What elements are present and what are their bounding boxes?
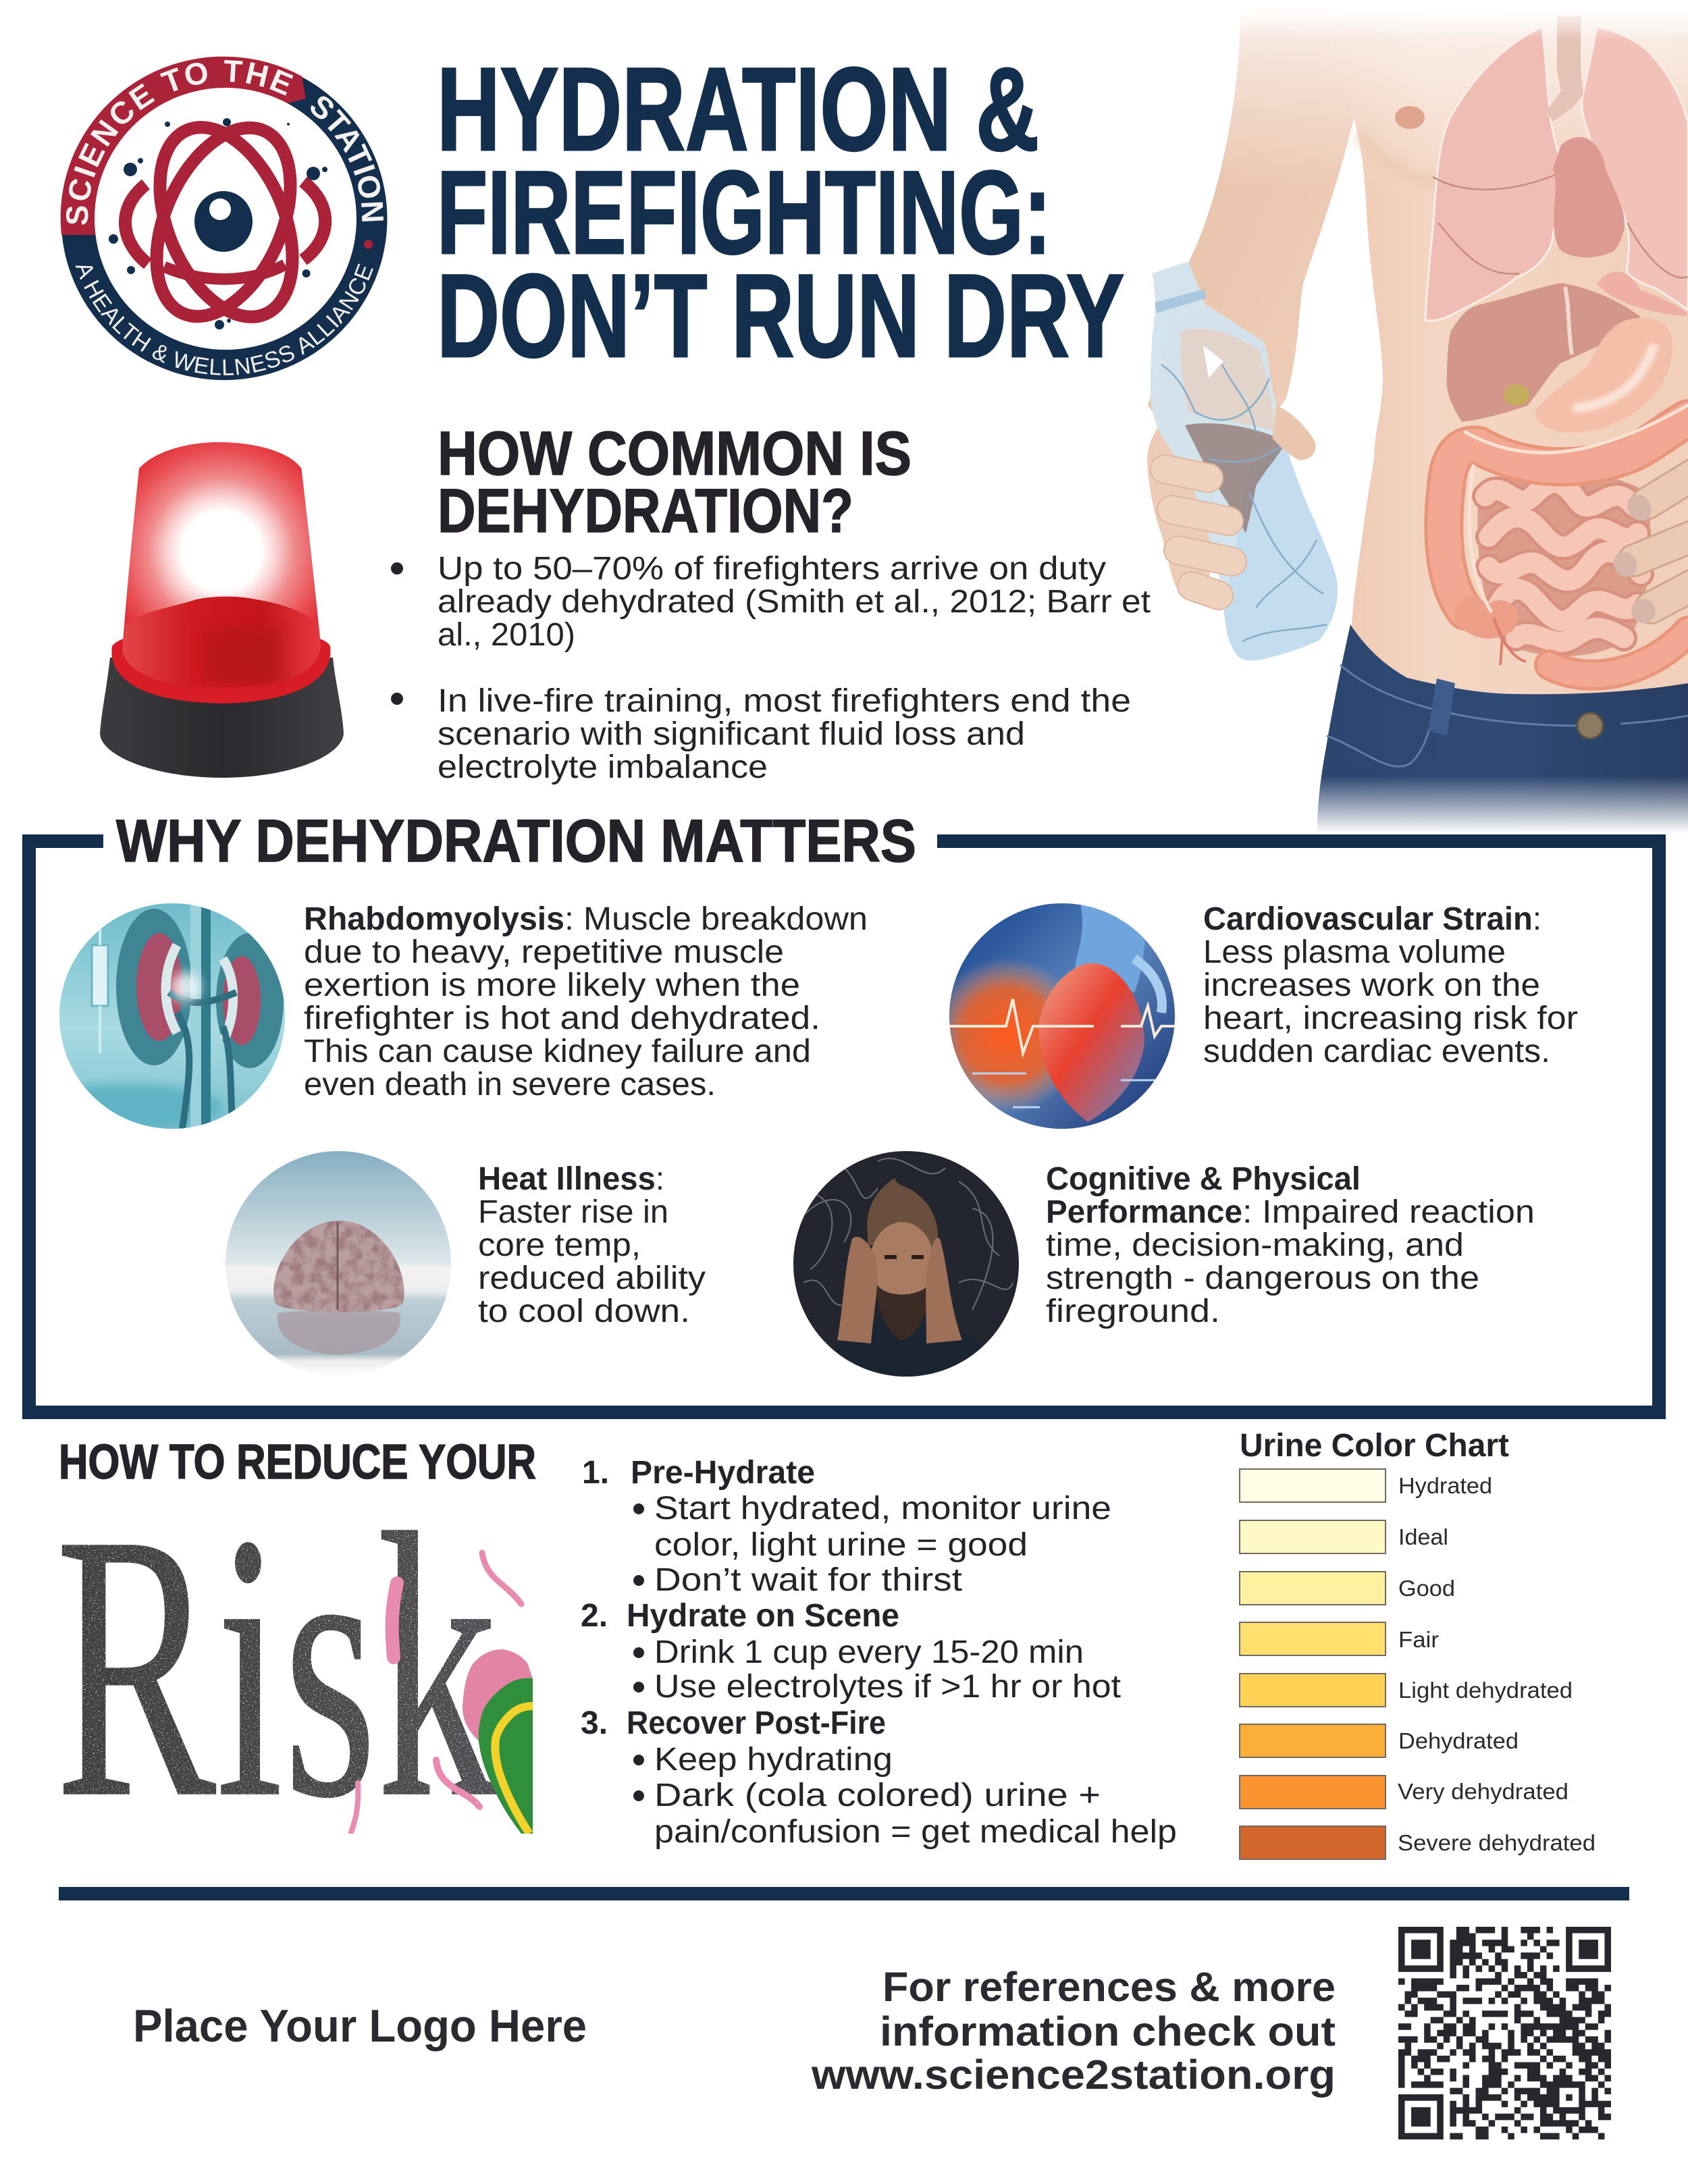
logo dots bbox=[109, 118, 327, 329]
step 1 bbox=[582, 1455, 1111, 1598]
hand fingers bbox=[1165, 469, 1232, 595]
swatch labels: Severe dehydrated bbox=[1398, 1830, 1595, 1855]
appendix vessel bbox=[1494, 618, 1526, 665]
title: FIREFIGHTING: bbox=[437, 147, 1051, 279]
image: risk being erased bbox=[55, 1456, 533, 1876]
text: rhabdomyolysis: firefighter is hot and dehydrated. bbox=[304, 1001, 820, 1036]
step 1: Start hydrated, monitor urine bbox=[654, 1491, 1111, 1526]
pale top wash bbox=[1222, 11, 1688, 163]
left forearm bbox=[837, 1237, 878, 1343]
text: cardiovascular strain: sudden cardiac events. bbox=[1203, 1034, 1550, 1069]
text: cognitive and physical performance: time, decision-making, and bbox=[1046, 1227, 1464, 1263]
eyes bbox=[885, 1255, 924, 1259]
swatch labels: Dehydrated bbox=[1398, 1728, 1519, 1753]
footer references text: For references & more bbox=[882, 1964, 1336, 2010]
brain body bbox=[273, 1221, 404, 1312]
text: heat illness: core temp, bbox=[478, 1227, 641, 1263]
title bbox=[437, 44, 1124, 382]
bullet one bbox=[391, 551, 1151, 653]
arm bbox=[1148, 7, 1354, 446]
text: heat illness: reduced ability bbox=[478, 1260, 706, 1296]
eraser crumbs bbox=[351, 1553, 521, 1832]
logo top text: SCIENCE TO THE bbox=[66, 59, 293, 225]
logo nucleus highlight bbox=[209, 198, 231, 220]
diaphragm tip bbox=[1597, 271, 1688, 316]
panel: why dehydration matters bbox=[22, 807, 1666, 1419]
step 3: Recover Post-Fire bbox=[627, 1705, 886, 1741]
heart bbox=[1553, 137, 1625, 257]
jeans bbox=[1317, 624, 1688, 837]
text: rhabdomyolysis bbox=[304, 901, 868, 1102]
bullet one: Up to 50–70% of firefighters arrive on duty bbox=[438, 551, 1106, 587]
step 2: Use electrolytes if >1 hr or hot bbox=[654, 1669, 1121, 1705]
eraser pink tip bbox=[463, 1649, 533, 1755]
belt loop bbox=[1428, 678, 1455, 736]
stomach bbox=[1535, 318, 1672, 433]
footer references text: information check out bbox=[880, 2008, 1336, 2054]
step 2: 2. bbox=[581, 1598, 608, 1634]
trachea bbox=[1546, 16, 1583, 122]
bottle lower water tint bbox=[1224, 446, 1338, 660]
lung fissures bbox=[1433, 174, 1688, 277]
step 3: pain/confusion = get medical help bbox=[654, 1814, 1177, 1850]
hand palm bbox=[1147, 422, 1215, 594]
chart title: Urine Color Chart bbox=[1240, 1428, 1509, 1464]
hand thumb bbox=[1273, 405, 1315, 460]
siren dome lower bbox=[122, 597, 321, 687]
liver ligament bbox=[1565, 287, 1572, 354]
text: heat illness: to cool down. bbox=[478, 1294, 690, 1329]
footer rule bbox=[59, 1887, 1629, 1900]
heading: how to reduce your: HOW TO REDUCE YOUR bbox=[59, 1435, 536, 1489]
large intestine bbox=[1444, 405, 1688, 675]
text: rhabdomyolysis: This can cause kidney failure and bbox=[304, 1034, 811, 1069]
heading bbox=[438, 419, 912, 545]
dark band through bottle bbox=[1185, 423, 1286, 533]
text: cognitive and physical performance: Performance bbox=[1046, 1194, 1242, 1230]
hair bbox=[867, 1178, 938, 1246]
nipple bbox=[1395, 106, 1425, 129]
image: kidneys bbox=[34, 903, 285, 1130]
text: heat illness bbox=[478, 1161, 706, 1329]
shirt bbox=[810, 1316, 1006, 1377]
title: DON’T RUN DRY bbox=[437, 250, 1124, 382]
footer references text bbox=[811, 1964, 1336, 2098]
left lung bbox=[1582, 27, 1688, 310]
image: brain bbox=[226, 1151, 451, 1377]
illustration: torso with organs and crushed bottle bbox=[1114, 0, 1688, 837]
stomach highlight bbox=[1573, 344, 1654, 408]
logo: Science to the Station badge bbox=[61, 57, 388, 380]
fingers on abdomen bbox=[1634, 466, 1688, 608]
bullet two: scenario with significant fluid loss and bbox=[438, 716, 1025, 752]
siren dark core bbox=[203, 628, 284, 682]
beard bbox=[875, 1279, 932, 1340]
panel heading: WHY DEHYDRATION MATTERS bbox=[116, 807, 916, 874]
title: HYDRATION & bbox=[437, 44, 1039, 176]
text: rhabdomyolysis: exertion is more likely when the bbox=[304, 967, 800, 1003]
bottle bbox=[1151, 261, 1338, 661]
text: cardiovascular strain: Cardiovascular Strain: bbox=[1203, 901, 1541, 937]
logo red arc band bbox=[61, 57, 306, 235]
bottle cracks bbox=[1161, 365, 1327, 641]
text: cognitive and physical performance bbox=[1046, 1161, 1535, 1329]
text: cardiovascular strain: heart, increasing risk for bbox=[1203, 1001, 1578, 1036]
swatch labels: Light dehydrated bbox=[1398, 1678, 1573, 1703]
text: rhabdomyolysis: Rhabdomyolysis bbox=[304, 901, 564, 937]
logo nucleus bbox=[194, 191, 253, 252]
step 1: color, light urine = good bbox=[654, 1527, 1028, 1563]
footer references text: www.science2station.org bbox=[811, 2052, 1336, 2098]
eraser yellow stripe bbox=[495, 1706, 533, 1834]
siren glow bbox=[184, 513, 259, 589]
bottle collar bbox=[1155, 289, 1206, 313]
heading: DEHYDRATION? bbox=[438, 477, 853, 545]
siren base bbox=[100, 658, 344, 778]
text: heat illness: Faster rise in bbox=[478, 1194, 668, 1230]
step 3: Dark (cola colored) urine + bbox=[654, 1778, 1101, 1813]
step 3: Keep hydrating bbox=[654, 1742, 893, 1778]
section: how common is dehydration bbox=[391, 419, 1151, 785]
eraser green body bbox=[479, 1678, 533, 1834]
risk word: Risk bbox=[55, 1456, 498, 1876]
logo red dot bbox=[364, 240, 373, 248]
siren dome bbox=[122, 442, 321, 685]
step 3: 3. bbox=[581, 1705, 608, 1741]
step 3 bbox=[581, 1705, 1177, 1850]
swatch labels bbox=[1398, 1473, 1595, 1855]
logo inner white disc bbox=[95, 88, 357, 350]
logo station text: STATION bbox=[311, 96, 384, 221]
image: stressed man bbox=[793, 1151, 1019, 1377]
step 1: Pre-Hydrate bbox=[631, 1455, 815, 1491]
image: heart bbox=[930, 903, 1175, 1129]
swatch labels: Very dehydrated bbox=[1398, 1779, 1568, 1804]
colon band lines bbox=[1465, 405, 1688, 611]
panel frame bbox=[22, 834, 1666, 1419]
logo bottom text: A HEALTH & WELLNESS ALLIANCE bbox=[76, 263, 373, 375]
QR code bbox=[1398, 1927, 1611, 2139]
torso bbox=[1321, 7, 1688, 716]
text: rhabdomyolysis: due to heavy, repetitive muscle bbox=[304, 934, 784, 970]
bottle neck bbox=[1153, 261, 1205, 321]
bullet one: al., 2010) bbox=[438, 617, 575, 653]
text: cardiovascular strain: Less plasma volume bbox=[1203, 934, 1506, 970]
bottle highlight bbox=[1203, 346, 1223, 378]
text: cardiovascular strain bbox=[1203, 901, 1578, 1069]
text: cognitive and physical performance: Cognitive & Physical bbox=[1046, 1161, 1361, 1197]
text: cognitive and physical performance: fireground. bbox=[1046, 1294, 1220, 1329]
text: cognitive and physical performance: : Impaired reaction bbox=[1242, 1194, 1535, 1230]
swatch labels: Good bbox=[1398, 1576, 1455, 1601]
right forearm bbox=[926, 1238, 962, 1343]
text: rhabdomyolysis: : Muscle breakdown bbox=[564, 901, 868, 937]
swatches bbox=[1240, 1469, 1386, 1859]
siren icon bbox=[100, 442, 344, 778]
bullet one: already dehydrated (Smith et al., 2012; Barr et bbox=[438, 584, 1151, 620]
step 2: Drink 1 cup every 15-20 min bbox=[654, 1634, 1084, 1670]
swatch labels: Hydrated bbox=[1398, 1473, 1492, 1498]
bullet two: electrolyte imbalance bbox=[438, 749, 768, 785]
swatch labels: Fair bbox=[1398, 1627, 1439, 1652]
logo atom orbits bbox=[125, 107, 325, 337]
heading: HOW COMMON IS bbox=[438, 419, 912, 488]
text: heat illness: Heat Illness: bbox=[478, 1161, 664, 1197]
hydration steps list bbox=[581, 1455, 1177, 1850]
face bbox=[870, 1222, 934, 1306]
right lung bbox=[1425, 27, 1561, 321]
waistband seam bbox=[1340, 665, 1688, 726]
footer logo placeholder: Place Your Logo Here bbox=[133, 2000, 587, 2052]
bottle body bbox=[1151, 304, 1338, 661]
step 1: Don’t wait for thirst bbox=[654, 1562, 962, 1598]
text: cardiovascular strain: increases work on the bbox=[1203, 967, 1540, 1003]
brain reflection bbox=[278, 1310, 400, 1355]
bullet two: In live-fire training, most firefighters end the bbox=[438, 683, 1131, 719]
liver bbox=[1446, 283, 1641, 422]
gallbladder bbox=[1504, 384, 1529, 406]
step 1: 1. bbox=[582, 1455, 609, 1491]
bullet two bbox=[391, 683, 1131, 785]
arm seen through bottle bbox=[1180, 329, 1278, 432]
step 2: Hydrate on Scene bbox=[627, 1598, 899, 1634]
muscle shading bbox=[1357, 135, 1445, 182]
text: cognitive and physical performance: strength - dangerous on the bbox=[1046, 1260, 1479, 1296]
urine color chart bbox=[1240, 1428, 1595, 1859]
swatch labels: Ideal bbox=[1398, 1524, 1448, 1549]
finger nails bbox=[1610, 490, 1660, 627]
small intestine bbox=[1477, 472, 1651, 656]
jeans button bbox=[1577, 713, 1603, 739]
step 2 bbox=[581, 1598, 1121, 1705]
pocket seam bbox=[1327, 722, 1431, 766]
text: rhabdomyolysis: even death in severe cases. bbox=[304, 1067, 716, 1102]
siren red lip bbox=[111, 627, 331, 703]
